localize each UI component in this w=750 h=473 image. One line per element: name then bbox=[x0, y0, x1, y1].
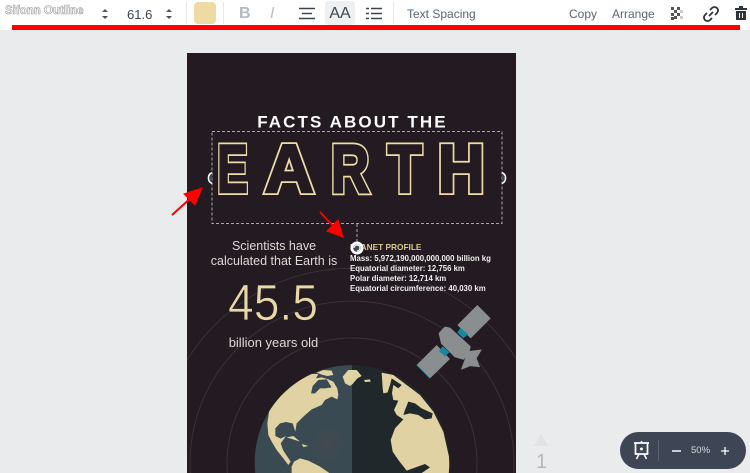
planet profile list: Equatorial diameter: 12,756 km bbox=[350, 264, 465, 273]
font size control: 61.6 bbox=[127, 7, 152, 22]
headline: earth outline: T bbox=[388, 132, 422, 207]
red underline bbox=[12, 25, 740, 30]
zoom divider bbox=[658, 440, 659, 461]
panel connectors bbox=[439, 328, 468, 356]
globe lit half bbox=[250, 360, 352, 473]
planet profile heading: PLANET PROFILE bbox=[350, 242, 422, 252]
satellite body bbox=[439, 327, 470, 359]
italic button: I bbox=[270, 5, 274, 22]
iceland bbox=[364, 379, 371, 382]
hudson bay bbox=[311, 379, 332, 393]
north sea and baltic bbox=[388, 378, 402, 393]
align icon bbox=[299, 8, 315, 20]
age unit: billion years old bbox=[229, 335, 318, 350]
headline: earth outline: A bbox=[265, 132, 314, 207]
south america bbox=[292, 458, 329, 473]
satellite dish bbox=[462, 350, 481, 369]
zoom value: 50% bbox=[691, 445, 710, 456]
trash icon bbox=[735, 6, 747, 20]
link icon bbox=[703, 6, 719, 22]
ocean glow bbox=[322, 440, 332, 450]
satellite bbox=[417, 305, 491, 378]
headline: earth outline: R bbox=[331, 132, 369, 207]
age number: 45.5 bbox=[228, 274, 318, 331]
list icon bbox=[366, 8, 382, 20]
selection box bbox=[208, 132, 506, 242]
age intro text: calculated that Earth is bbox=[211, 254, 337, 268]
globe bbox=[250, 360, 455, 473]
zoom in bbox=[721, 447, 729, 455]
headline: earth outline: R bbox=[331, 132, 369, 207]
continents bbox=[267, 370, 450, 473]
headline: earth outline: E bbox=[217, 132, 248, 207]
planet profile list: Mass: 5,972,190,000,000,000 billion kg bbox=[350, 254, 491, 263]
headline: earth outline bbox=[217, 132, 485, 207]
europe and africa bbox=[382, 373, 450, 473]
text spacing button: Text Spacing bbox=[407, 7, 476, 21]
bold button: B bbox=[239, 5, 251, 22]
headline: earth outline: A bbox=[265, 132, 314, 207]
transparency icon bbox=[671, 7, 683, 20]
uppercase button bbox=[325, 1, 355, 25]
poster canvas bbox=[187, 53, 516, 473]
red arrow: rotate handle bbox=[320, 212, 343, 237]
planet profile list: Equatorial circumference: 40,030 km bbox=[350, 284, 486, 293]
red arrow: left handle bbox=[172, 188, 202, 215]
mediterranean sea bbox=[403, 402, 433, 419]
font name: Sifonn Outline bbox=[5, 5, 84, 17]
cuba bbox=[287, 436, 300, 442]
headline: earth outline: T bbox=[388, 132, 422, 207]
solar panels bbox=[417, 305, 491, 378]
planet profile list: Polar diameter: 12,714 km bbox=[350, 274, 446, 283]
top toolbar bbox=[0, 0, 750, 30]
toolbar dividers bbox=[186, 2, 394, 24]
copy button: Copy bbox=[569, 7, 597, 21]
canadian islands bbox=[317, 370, 333, 376]
uppercase button: AA bbox=[329, 5, 351, 22]
headline: earth outline: E bbox=[217, 132, 248, 207]
zoom control pill bbox=[620, 432, 746, 469]
greenland bbox=[343, 370, 362, 386]
age intro text bbox=[211, 239, 337, 268]
rotate handle bbox=[350, 242, 364, 254]
page triangle bbox=[534, 434, 548, 446]
stepper icons bbox=[102, 9, 172, 19]
presentation icon bbox=[634, 441, 649, 460]
zoom out bbox=[672, 450, 681, 452]
planet profile list bbox=[350, 254, 491, 293]
north america bbox=[267, 374, 338, 465]
age intro text: Scientists have bbox=[232, 239, 316, 253]
headline: facts about the: FACTS ABOUT THE bbox=[257, 112, 448, 132]
headline: earth outline: H bbox=[438, 132, 485, 207]
hispaniola bbox=[302, 444, 308, 447]
panel edge bbox=[417, 365, 430, 378]
colour swatch bbox=[194, 2, 216, 24]
arrange button: Arrange bbox=[612, 7, 655, 21]
globe shaded half bbox=[352, 365, 449, 473]
orbit rings bbox=[187, 268, 516, 473]
left handle bbox=[208, 172, 212, 184]
headline: earth outline: H bbox=[438, 132, 485, 207]
right handle bbox=[502, 172, 506, 184]
